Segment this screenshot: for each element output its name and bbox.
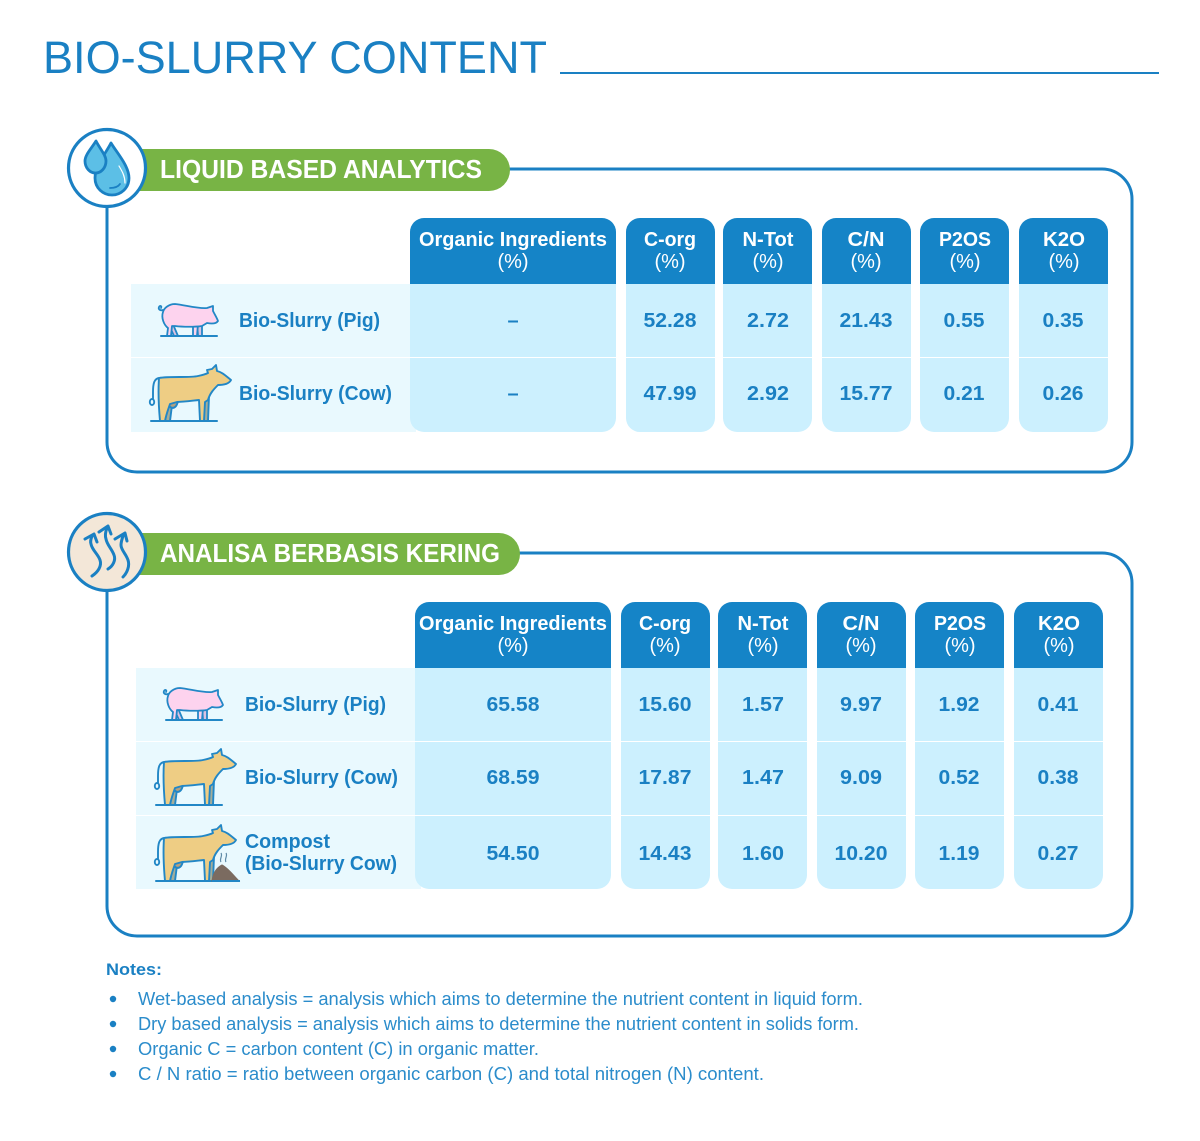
column: C-org: (%): [649, 635, 681, 657]
column: C/N: (%): [845, 635, 877, 657]
note 4: C / N ratio = ratio between organic carbon (C) and total nitrogen (N) content.: [138, 1064, 764, 1084]
column: K2O: 0.26: [1042, 383, 1084, 405]
panel: liquid based analytics: [68, 130, 1132, 472]
column: P2OS: 0.52: [938, 767, 980, 789]
column: C-org: 52.28: [644, 310, 696, 332]
note 3: Organic C = carbon content (C) in organic matter.: [138, 1039, 539, 1059]
column: N-Tot: 2.72: [747, 310, 789, 332]
column: organic ingredients: 65.58: [486, 694, 540, 716]
column: organic ingredients: (%): [497, 251, 529, 273]
column: C-org: 14.43: [638, 843, 692, 865]
row labels background: [131, 284, 416, 432]
row labels background: [136, 668, 421, 889]
label: compost bio-slurry cow: Compost: [245, 831, 330, 853]
column: N-Tot: N-Tot: [738, 613, 789, 635]
title: BIO-SLURRY CONTENT: [43, 32, 547, 83]
icon: cow: [150, 365, 231, 421]
column: N-Tot: (%): [752, 251, 784, 273]
panel: dry based analysis: [68, 514, 1132, 936]
column: K2O: 0.27: [1038, 843, 1078, 865]
column: organic ingredients: –: [507, 383, 519, 405]
column: C/N: 10.20: [834, 843, 888, 865]
note 2: Dry based analysis = analysis which aims to determine the nutrient content in solids form.: [138, 1014, 859, 1034]
column: P2OS: (%): [949, 251, 981, 273]
column: organic ingredients: –: [507, 310, 519, 332]
icon: pig: [164, 688, 223, 720]
column: K2O: (%): [1043, 635, 1075, 657]
column: organic ingredients: Organic Ingredients: [419, 229, 607, 251]
heading banner: [135, 149, 510, 191]
column: K2O: [1014, 602, 1103, 889]
column: P2OS: 0.21: [944, 383, 984, 405]
column: organic ingredients: 54.50: [486, 843, 540, 865]
column: C-org: C-org: [644, 229, 696, 251]
column: P2OS: P2OS: [939, 229, 991, 251]
column: P2OS: 1.92: [938, 694, 980, 716]
column: organic ingredients: 68.59: [486, 767, 540, 789]
column: C/N: 21.43: [840, 310, 892, 332]
column: C-org: [621, 602, 710, 889]
column: P2OS: 0.55: [944, 310, 984, 332]
column: P2OS: 1.19: [938, 843, 980, 865]
column: K2O: K2O: [1043, 229, 1085, 251]
column: K2O: (%): [1048, 251, 1080, 273]
column: C-org: 17.87: [638, 767, 692, 789]
column: K2O: 0.41: [1038, 694, 1078, 716]
column: C-org: 47.99: [644, 383, 696, 405]
column: C-org: C-org: [639, 613, 691, 635]
column: K2O: K2O: [1038, 613, 1080, 635]
column: C/N: C/N: [848, 229, 884, 251]
column: P2OS: [915, 602, 1004, 889]
column: C-org: 15.60: [638, 694, 692, 716]
column: C-org: [626, 218, 715, 432]
column: C/N: [822, 218, 911, 432]
heading banner: [135, 533, 520, 575]
column: C/N: [817, 602, 906, 889]
column: N-Tot: 2.92: [747, 383, 789, 405]
notes heading: Notes:: [106, 960, 162, 979]
column: K2O: 0.38: [1038, 767, 1078, 789]
column: organic ingredients: Organic Ingredients: [419, 613, 607, 635]
column: C/N: (%): [850, 251, 882, 273]
icon: rising vapour arrows: [68, 514, 146, 590]
icon: water drops: [68, 130, 146, 206]
column: organic ingredients: (%): [497, 635, 529, 657]
notes: [106, 960, 863, 1084]
note 1: Wet-based analysis = analysis which aims to determine the nutrient content in liquid form.: [138, 989, 863, 1009]
column: N-Tot: 1.57: [742, 694, 784, 716]
column: K2O: 0.35: [1042, 310, 1084, 332]
column: C/N: C/N: [842, 613, 880, 635]
heading banner: LIQUID BASED ANALYTICS: [160, 154, 482, 184]
column: N-Tot: 1.47: [742, 767, 784, 789]
column: C/N: 9.97: [840, 694, 882, 716]
label: bio-slurry pig: Bio-Slurry (Pig): [245, 694, 386, 716]
column: N-Tot: 1.60: [742, 843, 784, 865]
label: compost bio-slurry cow: (Bio-Slurry Cow): [245, 853, 397, 875]
column: N-Tot: (%): [747, 635, 779, 657]
column: organic ingredients: [410, 218, 616, 432]
column: organic ingredients: [415, 602, 611, 889]
icon: cow with compost: [155, 825, 240, 881]
column: P2OS: (%): [944, 635, 976, 657]
label: bio-slurry cow: Bio-Slurry (Cow): [239, 383, 392, 405]
column: P2OS: P2OS: [934, 613, 986, 635]
column: N-Tot: [723, 218, 812, 432]
label: bio-slurry cow: Bio-Slurry (Cow): [245, 767, 398, 789]
column: P2OS: [920, 218, 1009, 432]
column: K2O: [1019, 218, 1108, 432]
column: N-Tot: [718, 602, 807, 889]
icon: cow: [155, 749, 236, 805]
label: bio-slurry pig: Bio-Slurry (Pig): [239, 310, 380, 332]
column: C-org: (%): [654, 251, 686, 273]
column: C/N: 15.77: [840, 383, 892, 405]
heading banner: ANALISA BERBASIS KERING: [160, 538, 500, 568]
column: C/N: 9.09: [840, 767, 882, 789]
label: compost bio-slurry cow: [245, 831, 397, 875]
column: N-Tot: N-Tot: [742, 229, 794, 251]
icon: pig: [159, 304, 218, 336]
